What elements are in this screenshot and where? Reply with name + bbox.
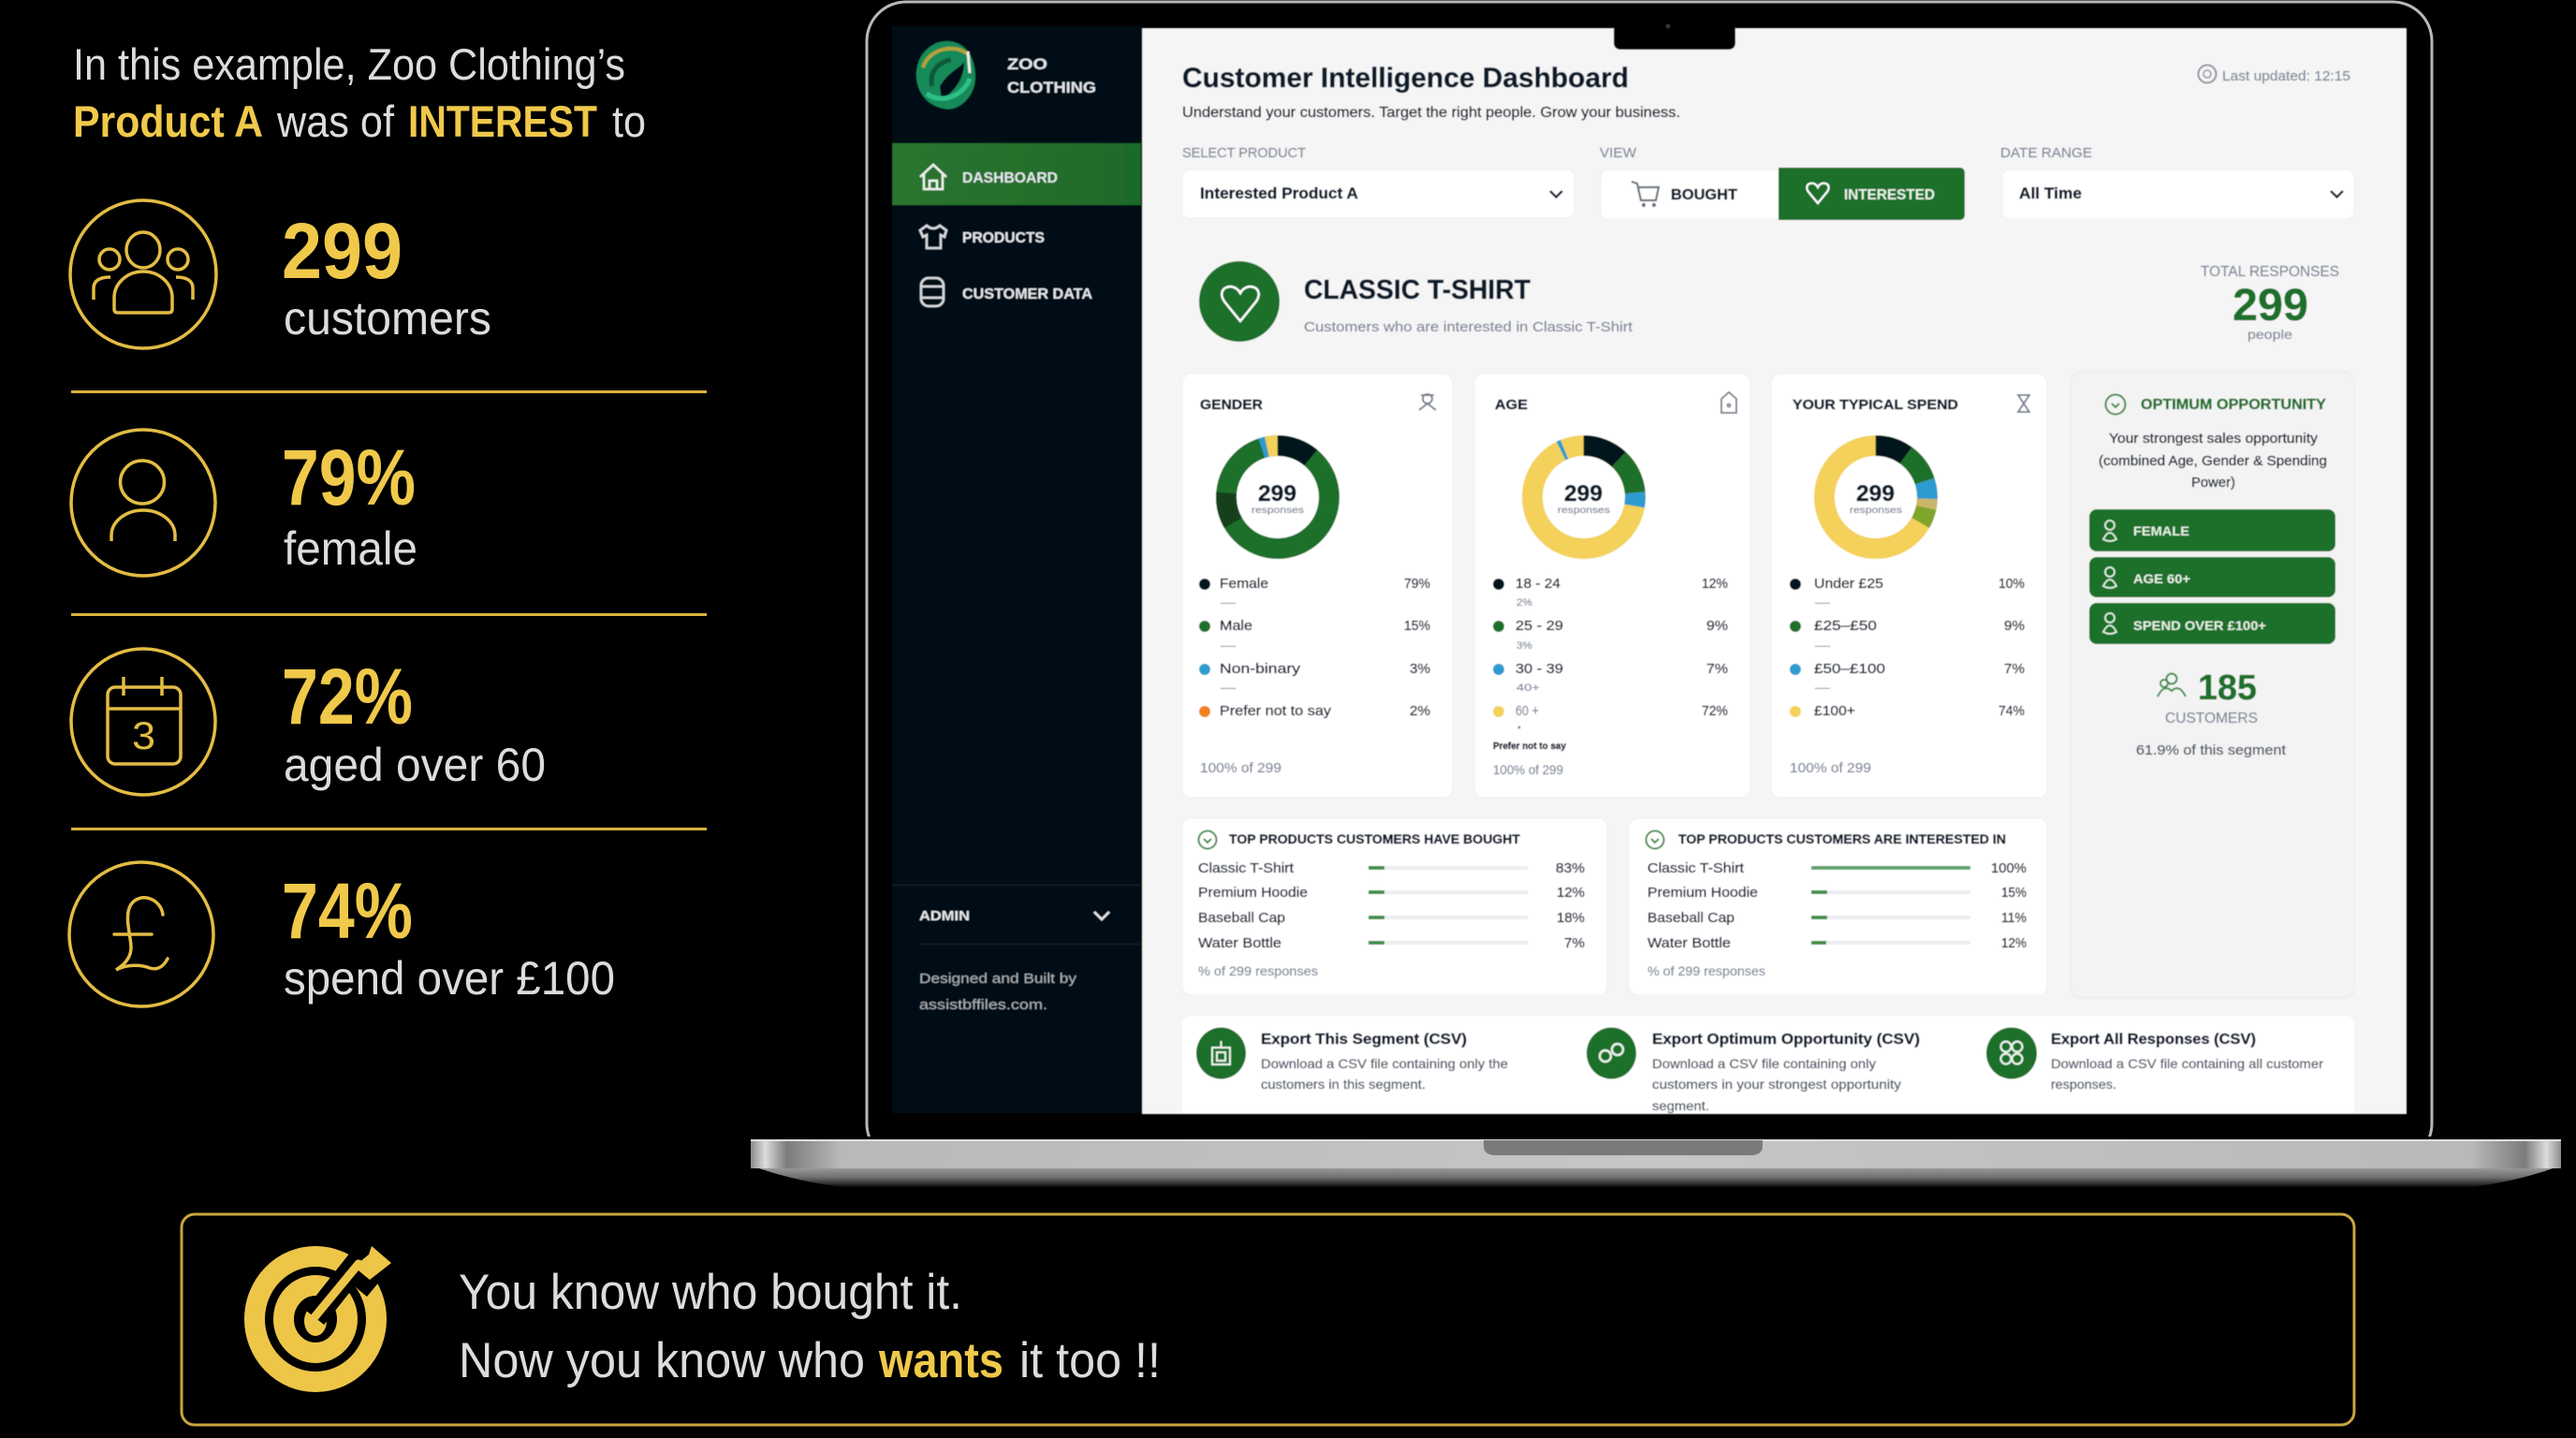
bar chart: interested: 100% <box>1991 860 2027 876</box>
panel: gender: 100% of 299 <box>1200 760 1281 776</box>
legend: gender: Male <box>1220 618 1252 634</box>
logo wordmark: CLOTHING <box>1007 79 1096 96</box>
badge: age 60+ <box>2089 557 2335 597</box>
panel: age <box>1474 374 1750 798</box>
legend: spend: — <box>1815 683 1830 694</box>
panel: typical spend: 100% of 299 <box>1790 760 1871 776</box>
logo wordmark <box>1007 55 1096 96</box>
export: optimum opportunity: Export Optimum Opportunity (CSV) <box>1652 1032 1920 1048</box>
last updated <box>2198 66 2350 84</box>
callout text: You know who bought it. <box>459 1265 962 1320</box>
panel: optimum opportunity <box>2071 372 2354 998</box>
export: this segment <box>1196 1028 1508 1092</box>
bar chart: interested: Premium Hoodie <box>1647 885 1758 901</box>
camera notch <box>1614 22 1735 50</box>
export: optimum opportunity: Download a CSV file containing only <box>1652 1056 1876 1071</box>
callout text: Now you know who <box>459 1333 865 1388</box>
legend: spend: — <box>1815 641 1830 652</box>
admin menu <box>919 908 1109 924</box>
opportunity description: (combined Age, Gender & Spending <box>2099 454 2327 469</box>
bar chart: interested: 12% <box>2001 935 2027 951</box>
total responses: 299 <box>2232 281 2308 330</box>
stat: 74% spend over £100: spend over £100 <box>284 952 615 1005</box>
bar chart: bought: 12% <box>1557 885 1585 901</box>
admin menu: ADMIN <box>919 908 970 924</box>
legend: age: 3% <box>1516 640 1532 652</box>
legend: gender: — <box>1221 683 1236 694</box>
laptop lid <box>867 2 2432 1163</box>
bar chart: bought: Water Bottle <box>1198 935 1281 951</box>
dashboard screen <box>892 22 2407 1114</box>
logo wordmark: ZOO <box>1007 55 1047 73</box>
legend: gender: 79% <box>1404 576 1430 592</box>
product header: CLASSIC T-SHIRT <box>1304 275 1530 305</box>
nav item: products: PRODUCTS <box>962 230 1045 246</box>
donut chart: spend: responses <box>1850 506 1902 516</box>
legend: gender <box>1199 576 1430 719</box>
bar chart: bought: 18% <box>1557 910 1585 926</box>
legend: age: 7% <box>1706 661 1728 677</box>
legend: gender: Female <box>1220 576 1268 592</box>
stat: 74% spend over £100 <box>282 867 615 1005</box>
filter: select product: Interested Product A <box>1200 184 1358 202</box>
stat: 79% female <box>282 433 417 575</box>
opportunity count: 61.9% of this segment <box>2136 742 2287 758</box>
sidebar credit <box>919 971 1077 1013</box>
panel: age: 100% of 299 <box>1493 762 1563 777</box>
callout text: it too !! <box>1019 1333 1161 1388</box>
panel: age: AGE <box>1495 397 1528 413</box>
legend: spend: 7% <box>2004 661 2025 677</box>
donut chart: gender: 299 <box>1258 481 1296 506</box>
export: all responses: Download a CSV file containing all customer <box>2051 1056 2323 1071</box>
legend: age <box>1493 576 1728 752</box>
legend: gender: Non-binary <box>1220 661 1301 677</box>
bar chart: bought: Baseball Cap <box>1198 910 1285 926</box>
intro heading: In this example, Zoo Clothing’s <box>73 39 625 89</box>
icon: calendar <box>71 649 215 795</box>
intro heading: INTEREST <box>408 96 597 146</box>
export: optimum opportunity <box>1587 1028 1920 1113</box>
nav item: customer data <box>921 278 1092 306</box>
panel: optimum opportunity: OPTIMUM OPPORTUNITY <box>2141 397 2327 413</box>
export: optimum opportunity: segment. <box>1652 1098 1709 1113</box>
stat: 72% aged over 60: 72% <box>282 653 413 741</box>
legend: age: 60 + <box>1515 703 1539 719</box>
legend: spend: 9% <box>2004 618 2025 634</box>
donut chart: spend <box>1824 446 1927 549</box>
filter: select product <box>1182 145 1574 218</box>
badge: spend over £100+: SPEND OVER £100+ <box>2133 619 2266 633</box>
panel: typical spend <box>1771 374 2047 798</box>
legend: spend: — <box>1815 598 1830 609</box>
stat: 299 customers: 299 <box>282 207 402 295</box>
stat: 72% aged over 60 <box>282 653 546 791</box>
donut chart: age: responses <box>1558 506 1610 516</box>
legend: age: 2% <box>1516 597 1532 609</box>
dashboard title: Customer Intelligence Dashboard <box>1182 63 1629 94</box>
filter: view toggle: INTERESTED <box>1844 187 1935 203</box>
intro heading <box>73 39 646 146</box>
panel: main content background <box>1142 28 2407 1114</box>
panel: top products interested: % of 299 responses <box>1647 963 1765 978</box>
bar chart: interested: Water Bottle <box>1647 935 1731 951</box>
laptop base <box>730 1137 2576 1202</box>
filter: date range: DATE RANGE <box>2000 145 2092 161</box>
product header: Customers who are interested in Classic T-Shirt <box>1304 319 1633 335</box>
panel: top products bought: % of 299 responses <box>1198 963 1318 978</box>
donut chart: gender: responses <box>1251 506 1304 516</box>
bar chart: interested: Baseball Cap <box>1647 910 1734 926</box>
filter: date range <box>2000 145 2354 219</box>
icon: bought check <box>1198 831 1217 848</box>
legend: gender: 2% <box>1410 703 1430 719</box>
sidebar credit: assistbffiles.com. <box>919 997 1047 1013</box>
filter: view toggle: VIEW <box>1600 145 1637 161</box>
panel: top products bought: TOP PRODUCTS CUSTOMERS HAVE BOUGHT <box>1229 831 1520 846</box>
panel: top products interested: TOP PRODUCTS CUSTOMERS ARE INTERESTED IN <box>1678 831 2006 846</box>
last updated: Last updated: 12:15 <box>2222 69 2350 84</box>
donut chart: spend: 299 <box>1856 481 1895 506</box>
stat: 79% female: 79% <box>282 433 416 521</box>
icon: customers group <box>70 200 216 348</box>
donut chart: age: 299 <box>1564 481 1603 506</box>
bar chart: bought: Classic T-Shirt <box>1198 860 1295 876</box>
legend: age: 72% <box>1702 703 1728 719</box>
total responses <box>2201 264 2339 342</box>
legend: age: 12% <box>1702 576 1728 592</box>
export: all responses: Export All Responses (CSV) <box>2051 1032 2256 1048</box>
dashboard title: Understand your customers. Target the right people. Grow your business. <box>1182 105 1680 121</box>
legend: age: 30 - 39 <box>1515 661 1563 677</box>
filter: date range: All Time <box>2019 184 2082 202</box>
dashboard title <box>1182 63 1680 121</box>
opportunity description: Your strongest sales opportunity <box>2109 432 2319 447</box>
filter: select product: SELECT PRODUCT <box>1182 145 1306 161</box>
legend: age: 40+ <box>1516 682 1540 694</box>
nav item: customer data: CUSTOMER DATA <box>962 286 1092 302</box>
legend: age: 9% <box>1706 618 1728 634</box>
export: this segment: Download a CSV file containing only the <box>1261 1056 1508 1071</box>
legend: spend: £100+ <box>1814 703 1855 719</box>
legend: spend: £50–£100 <box>1814 661 1885 677</box>
panel: typical spend: YOUR TYPICAL SPEND <box>1793 397 1958 413</box>
stat: 79% female: female <box>284 522 417 575</box>
stat: 299 customers: customers <box>284 292 491 345</box>
legend: gender: — <box>1221 641 1236 652</box>
export: this segment: Export This Segment (CSV) <box>1261 1032 1467 1048</box>
export: this segment: customers in this segment. <box>1261 1077 1426 1092</box>
panel: top products interested <box>1629 818 2047 995</box>
opportunity description: Power) <box>2191 476 2235 491</box>
nav item: products <box>920 226 1045 248</box>
legend: gender: — <box>1221 598 1236 609</box>
stat: 74% spend over £100: 74% <box>282 867 413 955</box>
nav item: dashboard <box>892 143 1141 205</box>
donut chart: gender <box>1226 446 1329 549</box>
icon: age <box>1721 392 1736 413</box>
legend: gender: Prefer not to say <box>1220 703 1332 719</box>
legend: age: 25 - 29 <box>1515 618 1563 634</box>
export: optimum opportunity: customers in your strongest opportunity <box>1652 1077 1901 1092</box>
panel: closing callout <box>182 1214 2354 1425</box>
nav item: dashboard: DASHBOARD <box>962 170 1058 186</box>
icon: gender <box>1419 394 1436 410</box>
legend: spend: 74% <box>1998 703 2025 719</box>
icon: target with arrow <box>255 1246 398 1382</box>
product header <box>1199 261 1633 342</box>
icon: person <box>71 430 215 576</box>
bar chart: bought: 7% <box>1564 935 1585 951</box>
legend: gender: 3% <box>1410 661 1430 677</box>
callout text: wants <box>878 1333 1003 1388</box>
legend: spend <box>1790 576 2025 719</box>
opportunity description <box>2099 432 2327 491</box>
export: all responses <box>1986 1028 2323 1092</box>
intro heading: was of <box>276 96 395 146</box>
legend: age: Prefer not to say <box>1493 741 1566 752</box>
opportunity count: CUSTOMERS <box>2165 711 2258 726</box>
opportunity count: 185 <box>2198 668 2257 708</box>
badge: female <box>2089 509 2335 551</box>
intro heading: Product A <box>73 96 263 146</box>
donut chart: age <box>1532 446 1635 549</box>
stat: 72% aged over 60: aged over 60 <box>284 739 546 791</box>
icon: spend <box>2018 395 2029 412</box>
legend: age: 18 - 24 <box>1515 576 1560 592</box>
icon: interested check <box>1646 831 1664 848</box>
export: all responses: responses. <box>2051 1077 2116 1092</box>
panel: sidebar <box>892 26 1141 1113</box>
laptop mockup <box>730 2 2576 1202</box>
total responses: TOTAL RESPONSES <box>2201 264 2339 280</box>
bar chart: bought <box>1198 860 1585 951</box>
filter: view toggle: BOUGHT <box>1671 187 1737 203</box>
legend: spend: 10% <box>1998 576 2025 592</box>
icon: pound sign <box>69 862 213 1006</box>
icon: opportunity check <box>2106 395 2125 414</box>
panel: top products bought <box>1182 818 1607 995</box>
panel: gender: GENDER <box>1200 397 1263 413</box>
panel: key statistics <box>69 39 707 1006</box>
legend: spend: £25–£50 <box>1814 618 1877 634</box>
badge: spend over £100+ <box>2089 603 2335 644</box>
bar chart: interested <box>1647 860 2027 951</box>
callout text <box>459 1265 1161 1388</box>
bar chart: bought: Premium Hoodie <box>1198 885 1308 901</box>
opportunity count <box>2136 668 2287 758</box>
badge: age 60+: AGE 60+ <box>2133 572 2190 586</box>
bar chart: interested: Classic T-Shirt <box>1647 860 1745 876</box>
legend: gender: 15% <box>1404 618 1430 634</box>
total responses: people <box>2247 327 2292 342</box>
bar chart: bought: 83% <box>1556 860 1585 876</box>
filter: view toggle <box>1600 145 1965 220</box>
bar chart: interested: 11% <box>2001 910 2027 926</box>
badge: female: FEMALE <box>2133 524 2189 538</box>
intro heading: to <box>612 96 646 146</box>
sidebar credit: Designed and Built by <box>919 971 1077 987</box>
panel: gender <box>1182 374 1453 798</box>
bar chart: interested: 15% <box>2001 885 2027 901</box>
legend: spend: Under £25 <box>1814 576 1883 592</box>
icon: zoo clothing logo <box>916 41 975 110</box>
panel: export options <box>1182 1016 2354 1113</box>
icon: calendar: 3 <box>132 713 155 757</box>
stat: 299 customers <box>282 207 491 345</box>
